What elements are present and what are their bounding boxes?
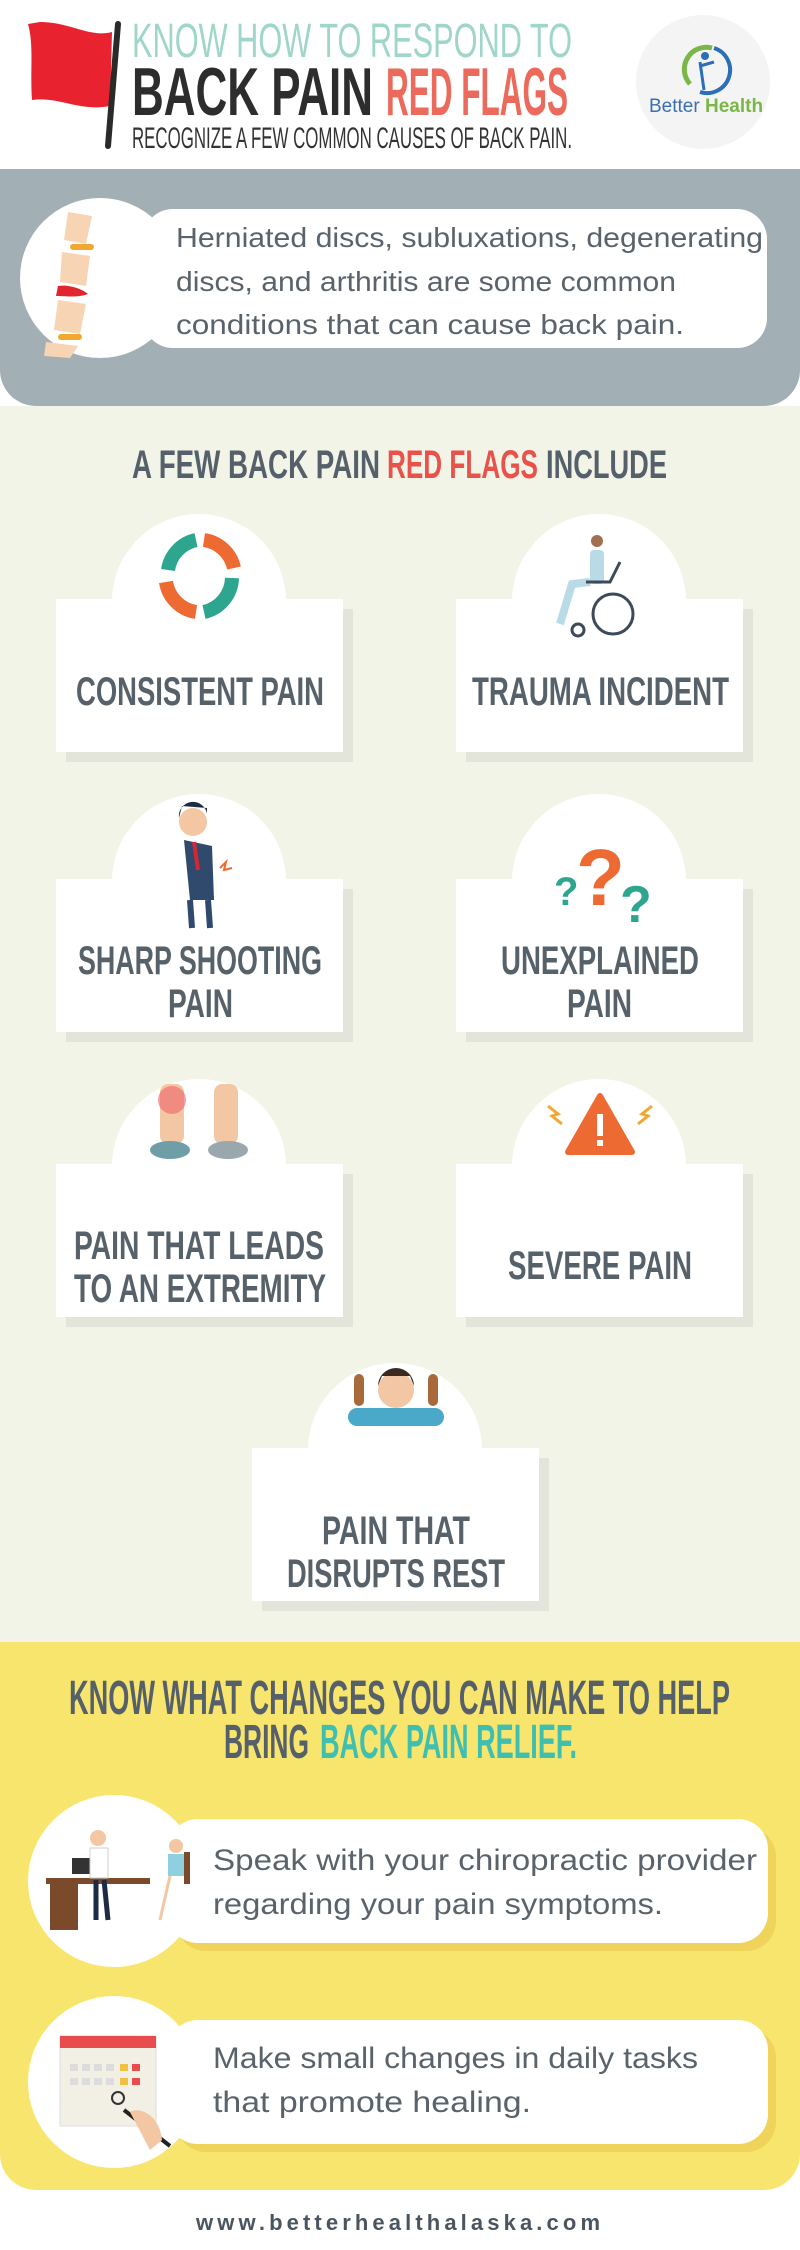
card: pain extremity: PAIN THAT LEADS <box>74 1224 324 1268</box>
card: disrupts rest: DISRUPTS REST <box>287 1552 505 1596</box>
card: consistent pain: CONSISTENT PAIN <box>76 670 324 714</box>
icon: wheelchair <box>560 535 633 636</box>
footer url: www.betterhealthalaska.com <box>195 2210 600 2235</box>
card: severe pain: SEVERE PAIN <box>508 1244 692 1288</box>
icon: question marks: ? <box>576 833 625 922</box>
text: causes: Herniated discs, subluxations, degenerating <box>176 222 763 253</box>
header: RED FLAGS <box>386 54 568 130</box>
item: daily tasks <box>28 1996 776 2168</box>
card: unexplained pain: UNEXPLAINED <box>501 939 699 983</box>
logo: Better Health <box>649 96 763 117</box>
title line 1: KNOW HOW TO RESPOND TO <box>132 15 572 68</box>
icon: man in pain <box>179 802 232 928</box>
icon: red flag <box>28 22 118 146</box>
icon: doctor and patient <box>46 1830 190 1930</box>
card: consistent pain <box>56 514 353 762</box>
icon: calendar <box>60 2036 170 2150</box>
icon: cycle arrows <box>166 540 234 612</box>
card: sharp shooting pain: SHARP SHOOTING <box>78 939 322 983</box>
icon: question marks <box>554 833 652 934</box>
card: unexplained pain <box>456 794 753 1042</box>
title line 2: BACK PAIN <box>132 54 373 130</box>
text: causes <box>176 222 763 340</box>
card: trauma incident <box>456 514 753 762</box>
panel: causes <box>0 169 800 406</box>
icon: spine <box>44 212 94 358</box>
item: daily tasks: that promote healing. <box>213 2086 531 2119</box>
icon: question marks: ? <box>620 876 652 934</box>
icon: warning <box>548 1096 652 1152</box>
heading: red flags <box>132 443 667 487</box>
header <box>28 15 770 155</box>
heading: relief: BACK PAIN RELIEF. <box>320 1716 577 1769</box>
heading: relief <box>69 1672 730 1769</box>
card: unexplained pain: PAIN <box>567 982 632 1026</box>
item: chiropractor: Speak with your chiropractic provider <box>213 1844 757 1877</box>
icon: sleepless person <box>348 1368 444 1426</box>
card: severe pain <box>456 1079 753 1327</box>
logo <box>636 15 770 149</box>
card: pain extremity: TO AN EXTREMITY <box>74 1267 326 1311</box>
heading: red flags: A FEW BACK PAIN <box>132 443 380 487</box>
item: chiropractor: regarding your pain symptoms. <box>213 1888 663 1921</box>
card: disrupts rest <box>252 1363 549 1611</box>
item: chiropractor <box>28 1795 776 1967</box>
card: sharp shooting pain <box>56 794 353 1042</box>
card: pain extremity <box>56 1079 353 1327</box>
heading: red flags: INCLUDE <box>546 443 667 487</box>
icon: legs <box>150 1084 248 1159</box>
icon: question marks: ? <box>554 870 578 914</box>
card: disrupts rest: PAIN THAT <box>322 1509 470 1553</box>
text: causes: discs, and arthritis are some common <box>176 266 676 297</box>
text: causes: conditions that can cause back pain. <box>176 309 684 340</box>
heading: red flags: RED FLAGS <box>387 443 538 487</box>
panel: red flags <box>0 406 800 1642</box>
heading: relief: BRING <box>224 1716 309 1769</box>
card: sharp shooting pain: PAIN <box>168 982 233 1026</box>
panel: relief <box>0 1642 800 2190</box>
item: daily tasks: Make small changes in daily tasks <box>213 2042 698 2075</box>
